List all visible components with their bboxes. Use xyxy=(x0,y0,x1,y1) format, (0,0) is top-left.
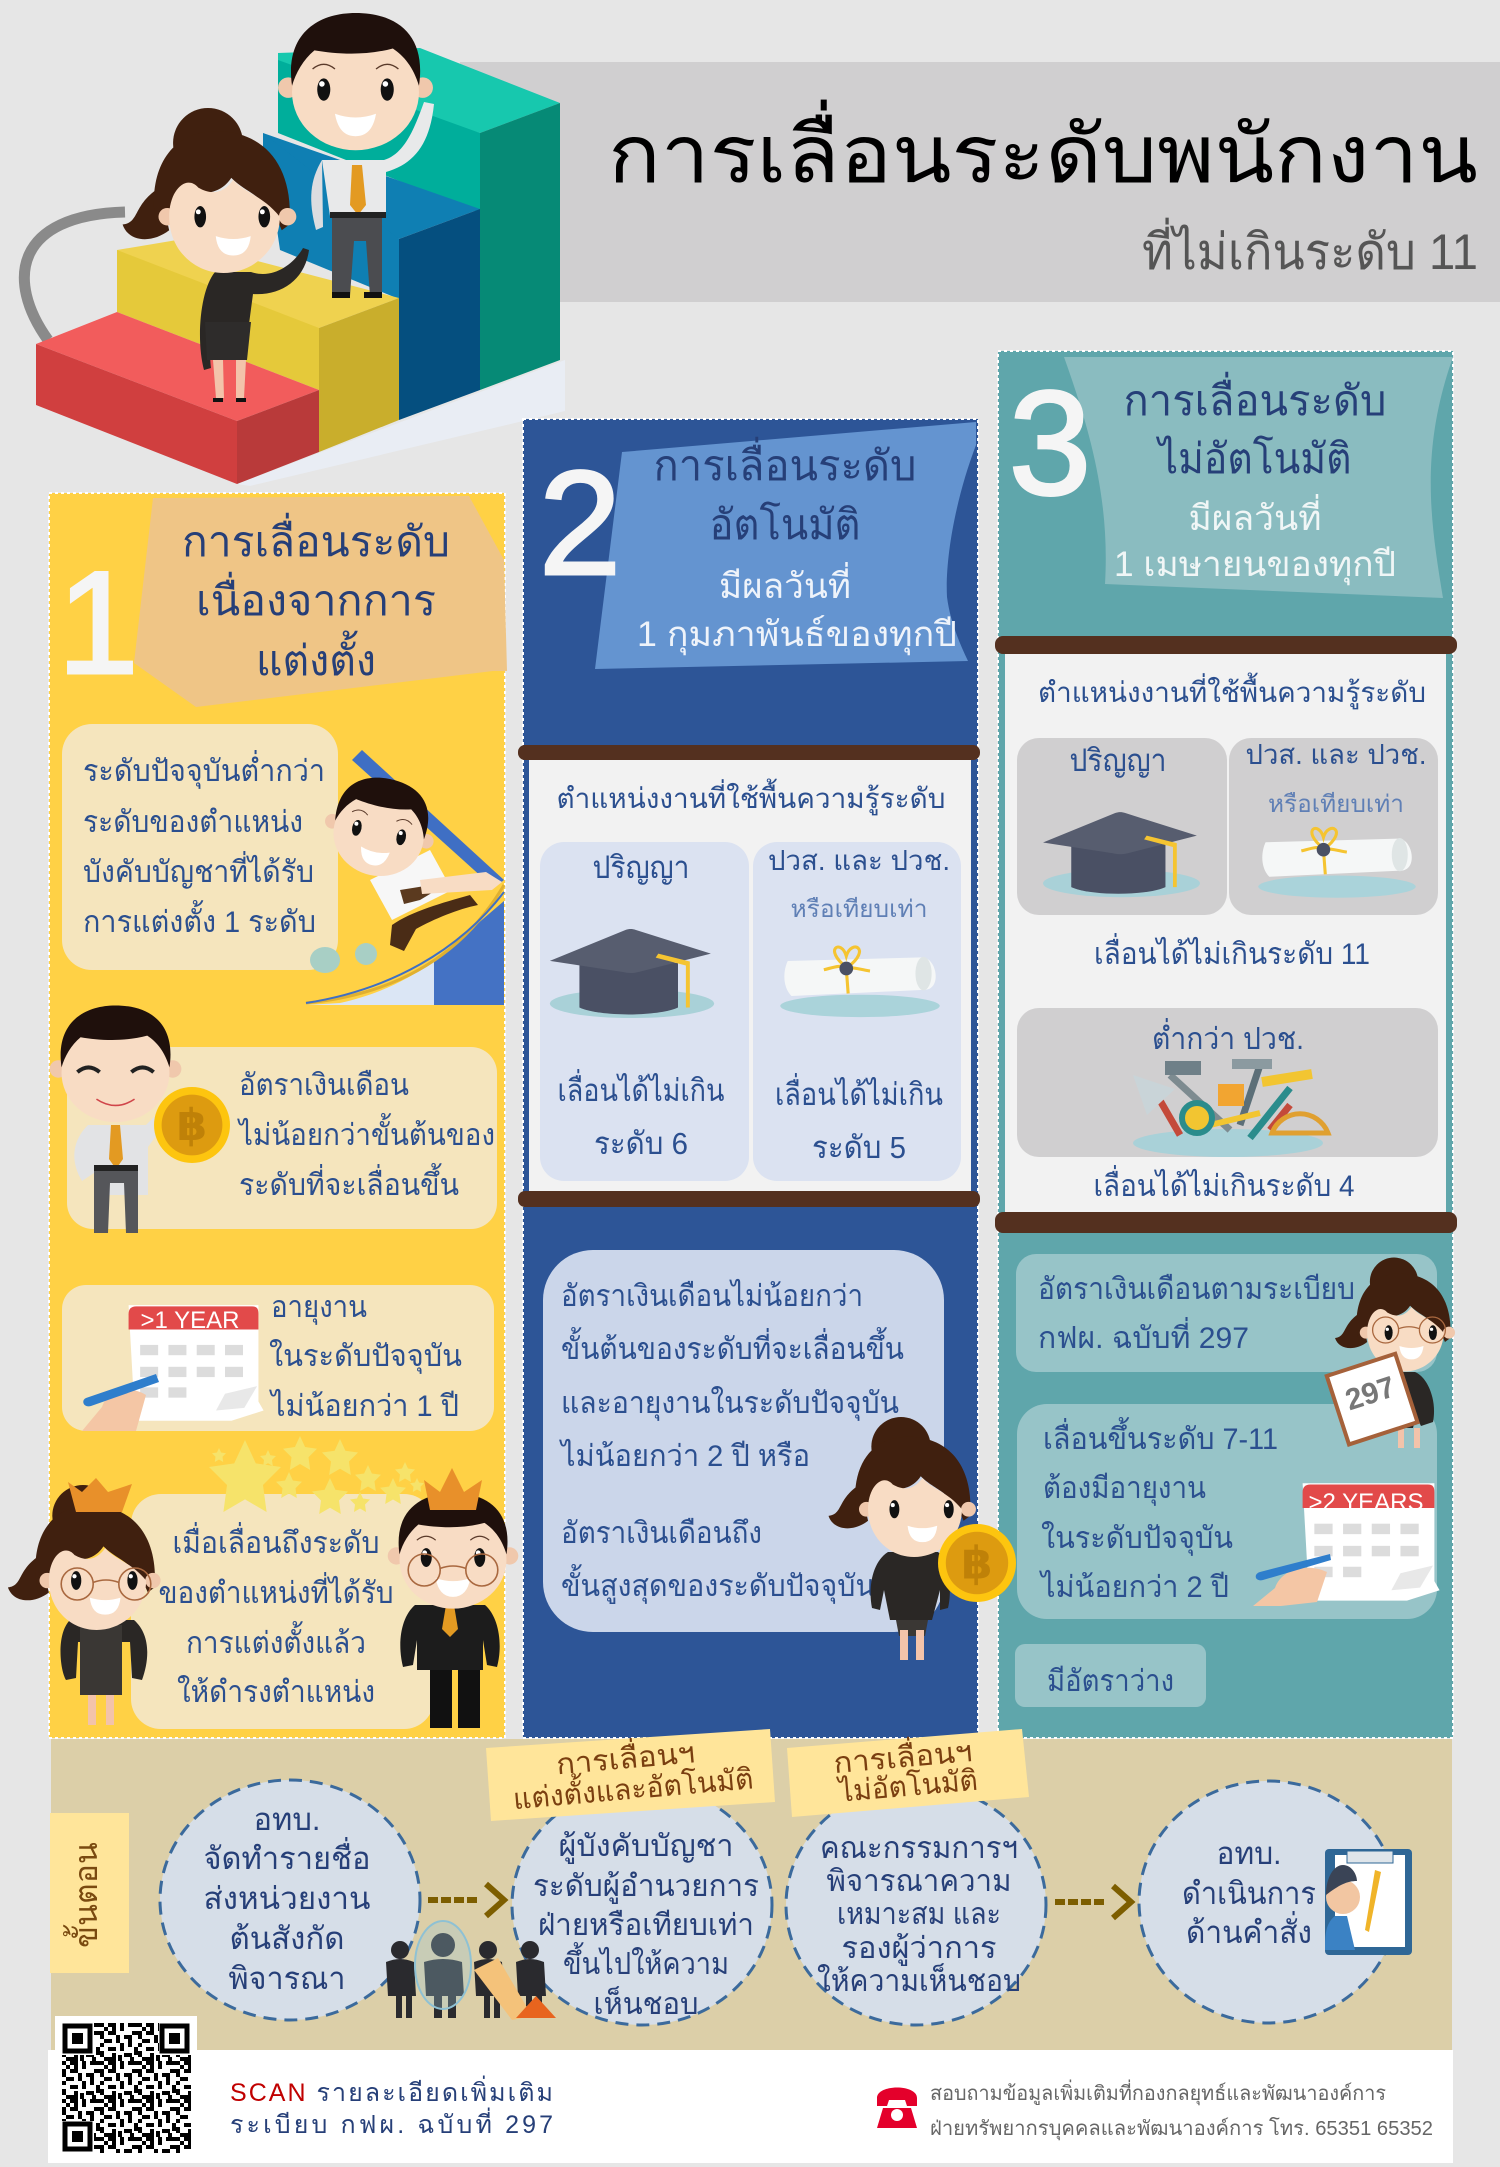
contact text: สอบถามข้อมูลเพิ่มเติมที่กองกลยุทธ์และพัฒนาองค์การ xyxy=(930,2079,1386,2106)
icon: telephone xyxy=(877,2088,917,2128)
subtitle: ที่ไม่เกินระดับ 11 xyxy=(1142,218,1478,280)
panel 3 heading xyxy=(1009,357,1453,598)
step 2 circle xyxy=(512,1785,772,2025)
panel 2 heading: มีผลวันที่ xyxy=(719,562,851,606)
bachelor card: เลื่อนได้ไม่เกิน xyxy=(558,1069,724,1108)
step 1 circle: ต้นสังกัด xyxy=(230,1921,344,1956)
note: non-automatic xyxy=(787,1729,1029,1817)
panel 1 background xyxy=(49,493,505,1738)
panel 1 box: appointment: ให้ดำรงตำแหน่ง xyxy=(177,1675,375,1709)
step 2 circle: ระดับผู้อำนวยการ xyxy=(533,1870,759,1904)
step 1 circle xyxy=(160,1780,420,2020)
below vocational card: ต่ำกว่า ปวช. xyxy=(1152,1018,1304,1056)
panel 1 box: tenure xyxy=(62,1285,494,1431)
arrow 2 xyxy=(1055,1886,1131,1918)
limit level 4: เลื่อนได้ไม่เกินระดับ 4 xyxy=(1094,1165,1354,1203)
diploma card xyxy=(1229,738,1438,915)
scan text: ระเบียบ กฟผ. ฉบับที่ 297 xyxy=(230,2107,553,2139)
panel 1 heading: แต่งตั้ง xyxy=(256,630,376,684)
limit level 11: เลื่อนได้ไม่เกินระดับ 11 xyxy=(1094,933,1370,971)
step 2 circle: ฝ่ายหรือเทียบเท่า xyxy=(538,1909,754,1942)
icon: calendar 1 year: >1 YEAR xyxy=(141,1307,239,1334)
diploma card: ปวส. และ ปวช. xyxy=(768,845,950,876)
panel 2 box: salary and tenure: และอายุงานในระดับปัจจุบัน xyxy=(561,1386,899,1422)
panel 1 box: appointment: ของตำแหน่งที่ได้รับ xyxy=(158,1572,394,1610)
contact text: ฝ่ายทรัพยากรบุคคลและพัฒนาองค์การ โทร. 65351 65352 xyxy=(930,2117,1433,2141)
note: appointment and automatic xyxy=(486,1727,775,1821)
panel 2 box: salary and tenure: อัตราเงินเดือนถึง xyxy=(561,1517,762,1550)
step 4 circle xyxy=(1139,1781,1397,2023)
panel 2 box: salary and tenure: อัตราเงินเดือนไม่น้อยกว่า xyxy=(561,1278,863,1313)
process label: ขั้นตอน xyxy=(63,1842,104,1948)
icon: people selection xyxy=(386,1921,556,2020)
panel 3 heading: ไม่อัตโนมัติ xyxy=(1156,434,1352,482)
panel 3 background xyxy=(998,351,1453,1738)
panel 1 heading xyxy=(57,496,507,707)
below vocational card xyxy=(1017,1008,1438,1157)
diploma card: ปวส. และ ปวช. xyxy=(1246,739,1426,770)
panel 1 heading: การเลื่อนระดับ xyxy=(182,513,450,565)
diploma card: หรือเทียบเท่า xyxy=(790,896,928,923)
step 1 circle: จัดทำรายชื่อ xyxy=(204,1837,370,1876)
man standing xyxy=(278,13,434,298)
note: non-automatic: การเลื่อนฯ xyxy=(832,1731,974,1780)
process label xyxy=(50,1813,129,1973)
panel 3 box: tenure: ต้องมีอายุงาน xyxy=(1043,1472,1206,1507)
process section background xyxy=(51,1739,1452,2050)
header band xyxy=(460,62,1500,302)
icon: woman holding rule 297 xyxy=(1327,1258,1455,1448)
contact text xyxy=(930,2079,1433,2141)
panel 3 heading: การเลื่อนระดับ xyxy=(1124,372,1386,424)
step 4 circle: อทบ. xyxy=(1216,1836,1282,1871)
panel 3 knowledge section xyxy=(995,636,1457,1233)
panel 2 knowledge section: ตำแหน่งงานที่ใช้พื้นความรู้ระดับ xyxy=(556,778,946,816)
step 3 circle: คณะกรรมการฯ xyxy=(820,1832,1018,1865)
panel 3 box: tenure: เลื่อนขึ้นระดับ 7-11 xyxy=(1043,1417,1278,1456)
bachelor card: ปริญญา xyxy=(1070,743,1166,778)
scan text: SCAN รายละเอียดเพิ่มเติม xyxy=(230,2075,553,2107)
panel 2 heading: 1 กุมภาพันธ์ของทุกปี xyxy=(637,615,957,655)
decoration: stars xyxy=(209,1436,424,1514)
panel 1 box: appointment xyxy=(131,1494,434,1729)
panel 3 box: vacancy xyxy=(1015,1644,1206,1707)
panel 1 box: level condition: การแต่งตั้ง 1 ระดับ xyxy=(83,900,316,939)
footer strip xyxy=(48,2050,1453,2163)
panel 1 box: salary: ไม่น้อยกว่าขั้นต้นของ xyxy=(237,1113,495,1152)
step 3 circle: ให้ความเห็นชอบ xyxy=(817,1962,1021,1998)
panel 2 background xyxy=(523,419,978,1738)
bachelor card: ปริญญา xyxy=(592,850,690,885)
icon: woman with coin xyxy=(829,1417,1016,1660)
panel 2 heading xyxy=(539,422,976,669)
note: appointment and automatic: การเลื่อนฯ xyxy=(555,1732,696,1781)
step 1 circle: พิจารณา xyxy=(228,1961,346,1996)
panel 2 heading: อัตโนมัติ xyxy=(710,500,860,548)
diploma card: เลื่อนได้ไม่เกิน xyxy=(775,1073,943,1112)
step 3 circle: พิจารณาความ xyxy=(826,1865,1012,1898)
panel 3 box: tenure xyxy=(1017,1404,1437,1619)
arrow 1 xyxy=(428,1884,504,1916)
panel 1 box: level condition: ระดับของตำแหน่ง xyxy=(83,806,303,839)
icon: calendar 2 years xyxy=(1253,1483,1440,1606)
bachelor card xyxy=(540,842,749,1181)
step 1 circle: อทบ. xyxy=(254,1802,320,1837)
step 3 circle: เหมาะสม และ xyxy=(837,1898,1001,1931)
panel 2 box: salary and tenure: ขั้นสูงสุดของระดับปัจจุบัน xyxy=(561,1564,875,1605)
step 3 circle xyxy=(786,1785,1046,2025)
step 2 circle: ขึ้นไปให้ความ xyxy=(563,1942,729,1981)
panel 2 heading: 2 xyxy=(539,441,621,606)
icon: man with coin xyxy=(50,1005,230,1233)
icon: crowned woman xyxy=(8,1478,161,1725)
panel 1 box: appointment: การแต่งตั้งแล้ว xyxy=(186,1621,366,1660)
panel 1 box: appointment: เมื่อเลื่อนถึงระดับ xyxy=(172,1522,380,1560)
step 1 circle: ส่งหน่วยงาน xyxy=(204,1881,370,1916)
bachelor card: ระดับ 6 xyxy=(594,1126,688,1161)
panel 2 box: salary and tenure: ขั้นต้นของระดับที่จะเลื่อนขึ้น xyxy=(561,1327,904,1366)
diploma card: หรือเทียบเท่า xyxy=(1268,791,1404,818)
panel 3 box: tenure: ในระดับปัจจุบัน xyxy=(1041,1521,1233,1557)
woman standing xyxy=(123,108,309,402)
note: appointment and automatic: แต่งตั้งและอัตโนมัติ xyxy=(511,1757,755,1816)
panel 2 box: salary and tenure: ไม่น้อยกว่า 2 ปี หรือ xyxy=(559,1438,810,1473)
panel 3 knowledge section: ตำแหน่งงานที่ใช้พื้นความรู้ระดับ xyxy=(1038,672,1426,710)
panel 1 box: level condition: บังคับบัญชาที่ได้รับ xyxy=(83,851,314,889)
icon: calendar 1 year xyxy=(82,1305,264,1431)
bachelor card xyxy=(1017,738,1227,915)
diploma card xyxy=(753,842,961,1181)
panel 1 box: tenure: ไม่น้อยกว่า 1 ปี xyxy=(269,1388,459,1423)
scan text xyxy=(230,2075,553,2139)
step 2 circle: ผู้บังคับบัญชา xyxy=(558,1830,734,1864)
panel 3 box: salary rule: อัตราเงินเดือนตามระเบียบ xyxy=(1038,1273,1355,1306)
note: non-automatic: ไม่อัตโนมัติ xyxy=(836,1763,979,1809)
step 4 circle: ด้านคำสั่ง xyxy=(1186,1911,1312,1950)
panel 2 knowledge section xyxy=(518,745,980,1207)
panel 1 box: salary xyxy=(67,1047,497,1229)
diploma card: ระดับ 5 xyxy=(812,1130,906,1165)
panel 3 heading: 3 xyxy=(1009,361,1091,526)
staircase illustration with two staff xyxy=(24,13,565,486)
panel 3 heading: มีผลวันที่ xyxy=(1188,494,1322,538)
step 2 circle: เห็นชอบ xyxy=(594,1985,698,2021)
QR code xyxy=(55,2016,197,2161)
step 3 circle: รองผู้ว่าการ xyxy=(842,1932,996,1966)
title: การเลื่อนระดับพนักงาน xyxy=(608,100,1478,199)
panel 3 box: vacancy: มีอัตราว่าง xyxy=(1047,1665,1174,1698)
panel 1 box: level condition xyxy=(62,724,338,970)
icon: crowned man xyxy=(388,1468,518,1728)
panel 1 heading: เนื่องจากการ xyxy=(196,572,436,624)
panel 2 box: salary and tenure xyxy=(543,1250,944,1632)
panel 3 box: salary rule xyxy=(1016,1254,1437,1372)
panel 1 box: level condition: ระดับปัจจุบันต่ำกว่า xyxy=(83,750,325,790)
panel 1 heading: 1 xyxy=(57,541,139,704)
icon: woman holding rule 297: 297 xyxy=(1342,1370,1399,1417)
panel 1 box: tenure: อายุงาน xyxy=(271,1291,367,1326)
panel 3 box: salary rule: กฟผ. ฉบับที่ 297 xyxy=(1038,1317,1249,1355)
panel 2 heading: การเลื่อนระดับ xyxy=(654,437,916,489)
panel 1 box: salary: อัตราเงินเดือน xyxy=(239,1069,409,1102)
icon: clipboard with staff xyxy=(1325,1849,1412,1955)
step 4 circle: ดำเนินการ xyxy=(1182,1876,1316,1911)
icon: man climbing with pencil xyxy=(306,750,504,1005)
panel 3 heading: 1 เมษายนของทุกปี xyxy=(1114,545,1396,585)
panel 1 box: salary: ระดับที่จะเลื่อนขึ้น xyxy=(239,1163,459,1202)
panel 1 box: tenure: ในระดับปัจจุบัน xyxy=(269,1339,462,1375)
icon: calendar 2 years: >2 YEARS xyxy=(1309,1489,1423,1516)
panel 3 box: tenure: ไม่น้อยกว่า 2 ปี xyxy=(1039,1569,1229,1604)
